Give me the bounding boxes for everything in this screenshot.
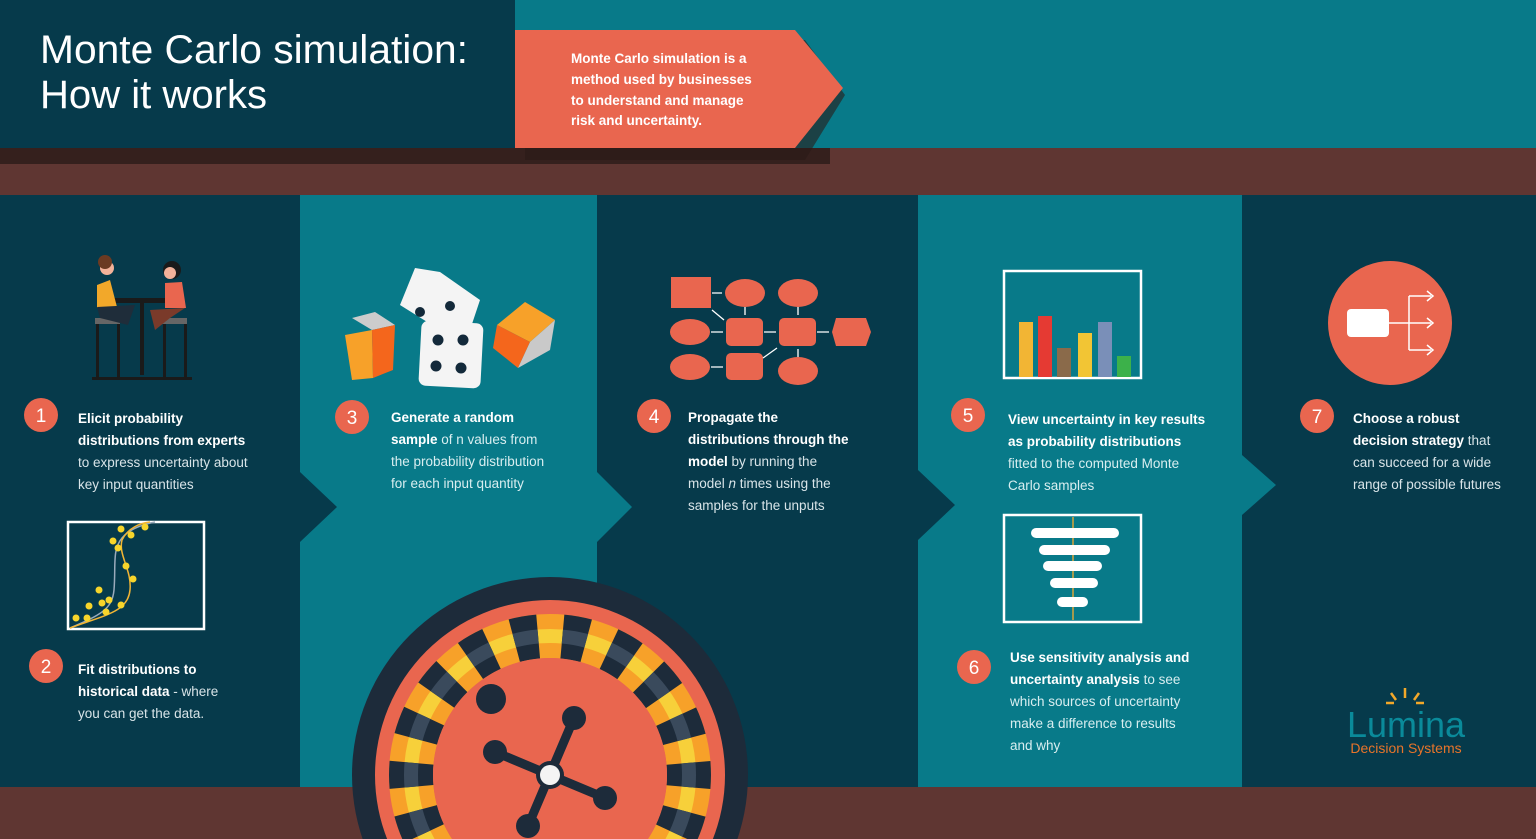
step 5 — [951, 398, 1205, 493]
step 1: Elicit probability — [78, 411, 184, 426]
step 6: which sources of uncertainty — [1009, 694, 1181, 709]
step 5: 5 — [963, 406, 973, 427]
step 6 — [957, 650, 1189, 753]
step 1: 1 — [36, 406, 46, 427]
bottom brown band — [0, 787, 1536, 839]
logo: Lumina: Lumina — [1347, 704, 1466, 745]
step 3: sample of n values from — [391, 432, 537, 447]
step 1: key input quantities — [78, 477, 194, 492]
chart: tornado — [1004, 515, 1141, 622]
step 7: Choose a robust — [1353, 411, 1460, 426]
step 7: range of possible futures — [1353, 477, 1501, 492]
step 1: to express uncertainty about — [78, 455, 248, 470]
step 1 — [24, 398, 248, 492]
step 4: model n times using the — [688, 476, 831, 491]
callout: intro: method used by businesses — [571, 72, 752, 87]
step 2: you can get the data. — [78, 706, 204, 721]
step 6: 6 — [969, 658, 979, 679]
step 2: Fit distributions to — [78, 662, 196, 677]
step 6: uncertainty analysis to see — [1010, 672, 1180, 687]
background: top teal — [0, 0, 1536, 195]
step 2: historical data - where — [78, 684, 218, 699]
step 4: Propagate the — [688, 410, 779, 425]
logo: Lumina — [1347, 688, 1466, 756]
callout: intro: to understand and manage — [571, 93, 744, 108]
chart: bar chart — [1004, 271, 1141, 378]
columns — [0, 195, 1536, 787]
step 7: 7 — [1312, 407, 1322, 428]
step 2: 2 — [41, 657, 51, 678]
step 4: distributions through the — [688, 432, 849, 447]
icon: dice — [345, 268, 555, 389]
step 7: can succeed for a wide — [1353, 455, 1491, 470]
icon: flowchart — [670, 277, 871, 385]
step 6: and why — [1010, 738, 1061, 753]
step 5: Carlo samples — [1008, 478, 1095, 493]
step 5: as probability distributions — [1008, 434, 1181, 449]
icon: two people at table — [92, 255, 192, 380]
callout: intro: risk and uncertainty. — [571, 113, 702, 128]
step 3: 3 — [347, 408, 357, 429]
title panel: How it works — [40, 73, 267, 117]
step 3: for each input quantity — [391, 476, 524, 491]
title panel — [0, 0, 515, 148]
icon: decision circle — [1328, 261, 1452, 385]
chart: fitted curve — [68, 522, 204, 629]
callout: intro — [515, 30, 845, 160]
step 2 — [29, 649, 218, 721]
step 7 — [1300, 399, 1501, 492]
step 3: the probability distribution — [391, 454, 544, 469]
step 6: Use sensitivity analysis and — [1010, 650, 1189, 665]
icon: roulette wheel — [352, 577, 748, 839]
title panel: Monte Carlo simulation: — [40, 28, 468, 72]
step 5: View uncertainty in key results — [1008, 412, 1205, 427]
step 1: distributions from experts — [78, 433, 245, 448]
step 6: make a difference to results — [1010, 716, 1176, 731]
brown band top — [0, 148, 1536, 195]
step 3 — [335, 400, 544, 491]
step 4: model by running the — [688, 454, 817, 469]
logo: Lumina: Decision Systems — [1350, 740, 1462, 756]
step 3: Generate a random — [391, 410, 514, 425]
step 4 — [637, 399, 849, 513]
step 4: samples for the unputs — [688, 498, 825, 513]
callout: intro: Monte Carlo simulation is a — [571, 51, 747, 66]
step 7: decision strategy that — [1353, 433, 1490, 448]
step 4: 4 — [649, 407, 660, 428]
step 5: fitted to the computed Monte — [1008, 456, 1179, 471]
